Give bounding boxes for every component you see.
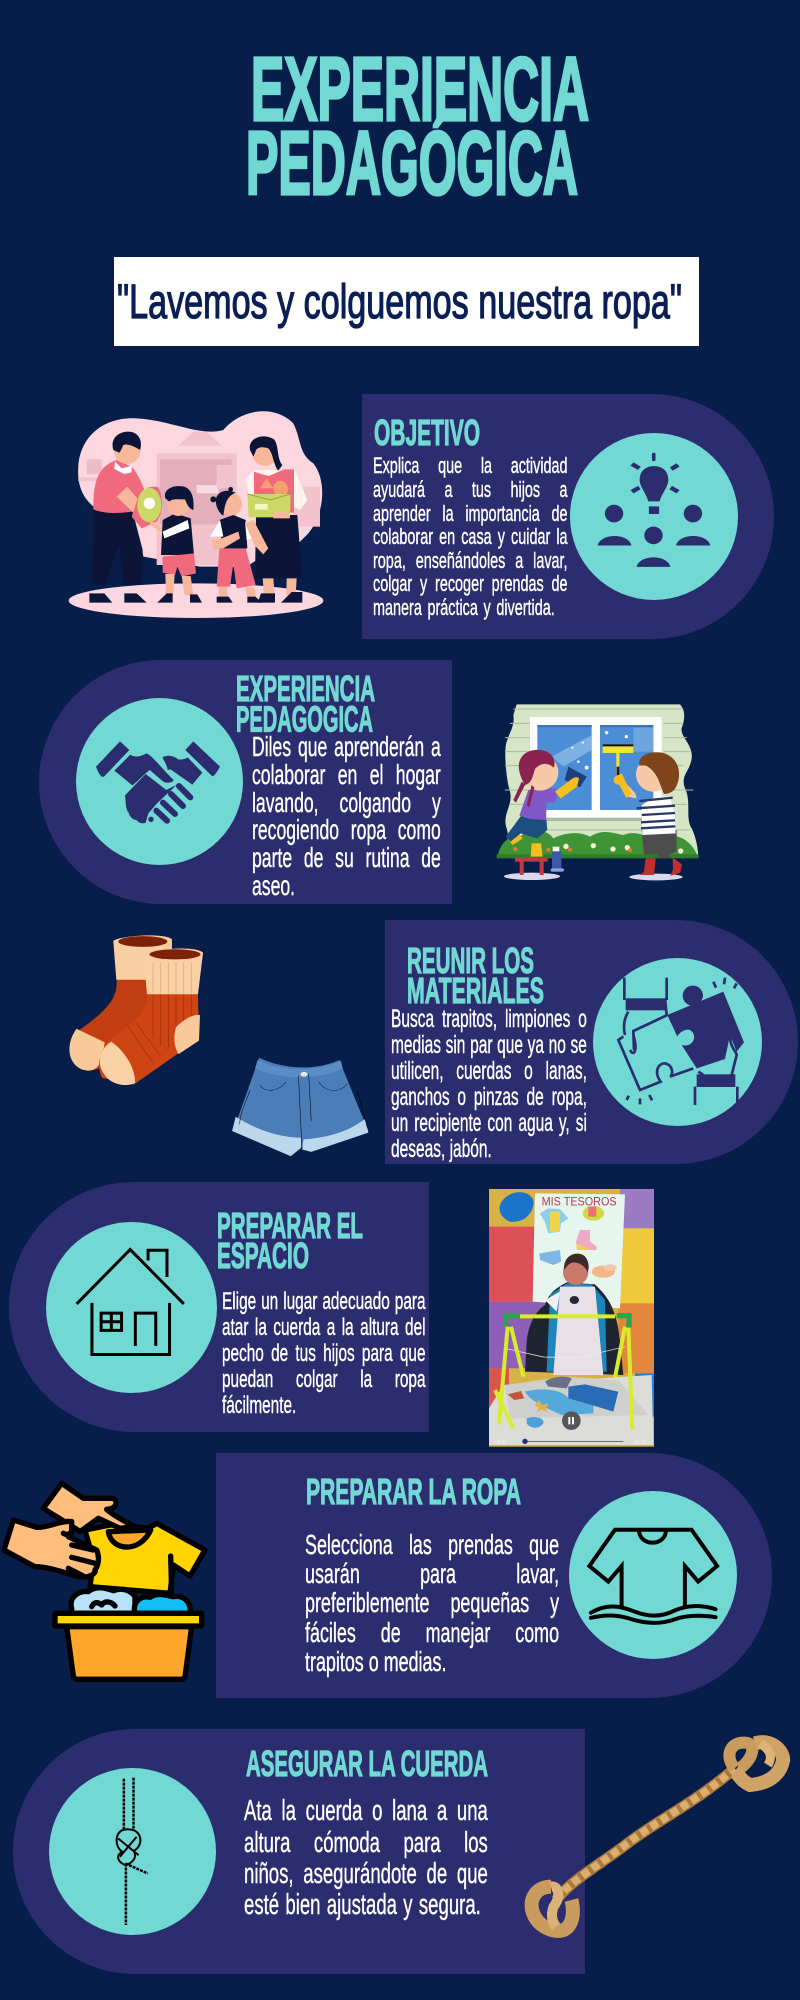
panel: objetivo [362, 394, 774, 639]
icon: knot [116, 1778, 148, 1925]
photo: teacher with mini clothesline video frame: MIS TESOROS [542, 1195, 617, 1209]
text: objetivo: aprender la importancia de [372, 501, 567, 526]
text: preparar la ropa: trapitos o medias. [305, 1646, 446, 1677]
text: experiencia pedagogica: Diles que aprenderán a [252, 731, 441, 762]
text: objetivo: ayudará a tus hijos a [372, 477, 567, 502]
photo: teacher with mini clothesline video frame [489, 1189, 654, 1447]
text: experiencia pedagogica: aseo. [252, 870, 295, 901]
icon circle: handshake [76, 698, 242, 865]
illustration: rope with knotted ends [524, 1735, 790, 1938]
photo: teacher with mini clothesline video frame: 00:03 [495, 1440, 507, 1445]
text: reunir los materiales [391, 1005, 587, 1163]
text: preparar el espacio: puedan colgar la ropa [222, 1366, 425, 1393]
subtitle box [114, 257, 699, 346]
text: preparar el espacio [222, 1288, 426, 1419]
text: asegurar la cuerda: esté bien ajustada y segura. [244, 1889, 481, 1921]
text: experiencia pedagogica: parte de su rutina de [252, 842, 441, 873]
illustration: socks [69, 935, 204, 1085]
text: preparar la ropa [305, 1529, 560, 1678]
icon: t-shirt in water [586, 1528, 720, 1625]
panel: preparar el espacio [9, 1182, 429, 1432]
icon circle: house [46, 1222, 217, 1393]
text: objetivo: colgar y recoger prendas de [372, 571, 567, 596]
text: reunir los materiales: deseas, jabón. [391, 1135, 492, 1163]
text: preparar la ropa: usarán para lavar, [305, 1558, 559, 1589]
heading: asegurar la cuerda: ASEGURAR LA CUERDA [246, 1743, 488, 1784]
icon circle: t-shirt [569, 1491, 737, 1659]
text: asegurar la cuerda: niños, asegurándote de que [244, 1858, 488, 1890]
illustration: denim shorts [232, 1058, 368, 1156]
heading: reunir los materiales [407, 940, 544, 1011]
title [246, 40, 589, 214]
text: objetivo [372, 453, 568, 620]
icon circle: knot [49, 1768, 216, 1935]
icon: hands joining puzzle pieces [616, 978, 744, 1105]
text: experiencia pedagogica: recogiendo ropa como [252, 814, 441, 845]
illustration: hands and laundry basin [1, 1480, 208, 1682]
text: objetivo: manera práctica y divertida. [372, 595, 554, 620]
text: reunir los materiales: utilicen, cuerdas o lanas, [391, 1057, 587, 1085]
panel: preparar la ropa [216, 1453, 772, 1698]
text: objetivo: Explica que la actividad [372, 453, 567, 478]
text: experiencia pedagogica: colaborar en el hogar [252, 759, 441, 790]
text: asegurar la cuerda: Ata la cuerda o lana a una [244, 1795, 488, 1827]
text: asegurar la cuerda: altura cómoda para los [244, 1827, 488, 1859]
heading: objetivo: OBJETIVO [374, 412, 480, 453]
heading: reunir los materiales: MATERIALES [407, 970, 544, 1011]
text: preparar el espacio: atar la cuerda a la altura del [222, 1314, 425, 1341]
text: preparar la ropa: Selecciona las prendas que [305, 1529, 559, 1560]
text: reunir los materiales: medias sin par que ya no se [391, 1031, 587, 1059]
icon: house [76, 1247, 185, 1356]
icon: lightbulb with people [598, 452, 710, 567]
icon circle: puzzle [593, 958, 762, 1126]
heading: experiencia pedagogica [236, 668, 375, 739]
heading: preparar el espacio: PREPARAR EL [217, 1205, 363, 1246]
icon: handshake [96, 741, 220, 824]
text: asegurar la cuerda [244, 1795, 488, 1921]
text: objetivo: colaborar en casa y cuidar la [372, 524, 567, 549]
illustration: children washing a window [496, 704, 698, 880]
text: preparar el espacio: fácilmente. [222, 1392, 296, 1419]
panel: asegurar la cuerda [13, 1729, 585, 1974]
text: preparar la ropa: fáciles de manejar como [305, 1617, 559, 1648]
text: preparar la ropa: preferiblemente pequeñas y [305, 1587, 559, 1618]
panel: reunir los materiales [385, 920, 798, 1164]
heading: experiencia pedagogica: PEDAGOGICA [236, 698, 373, 739]
photo: teacher with mini clothesline video frame: 01:37 [635, 1440, 647, 1445]
heading: preparar la ropa: PREPARAR LA ROPA [306, 1470, 521, 1512]
text: reunir los materiales: un recipiente con agua y, si [391, 1109, 587, 1137]
heading: preparar el espacio [217, 1205, 363, 1276]
text: reunir los materiales: ganchos o pinzas de ropa, [391, 1083, 587, 1111]
heading: reunir los materiales: REUNIR LOS [407, 940, 534, 981]
panel: experiencia pedagogica [39, 660, 452, 904]
text: experiencia pedagogica: lavando, colgando y [252, 786, 441, 818]
text: reunir los materiales: Busca trapitos, limpiones o [391, 1005, 587, 1033]
text: experiencia pedagogica [252, 731, 441, 901]
heading: experiencia pedagogica: EXPERIENCIA [236, 668, 375, 708]
text: objetivo: ropa, enseñándoles a lavar, [372, 548, 567, 573]
text: preparar el espacio: pecho de tus hijos para que [222, 1340, 425, 1367]
heading: preparar el espacio: ESPACIO [217, 1235, 309, 1276]
text: preparar el espacio: Elige un lugar adecuado para [222, 1288, 425, 1315]
icon circle: idea and people [570, 433, 738, 600]
illustration: family with children and boxes [68, 411, 324, 618]
